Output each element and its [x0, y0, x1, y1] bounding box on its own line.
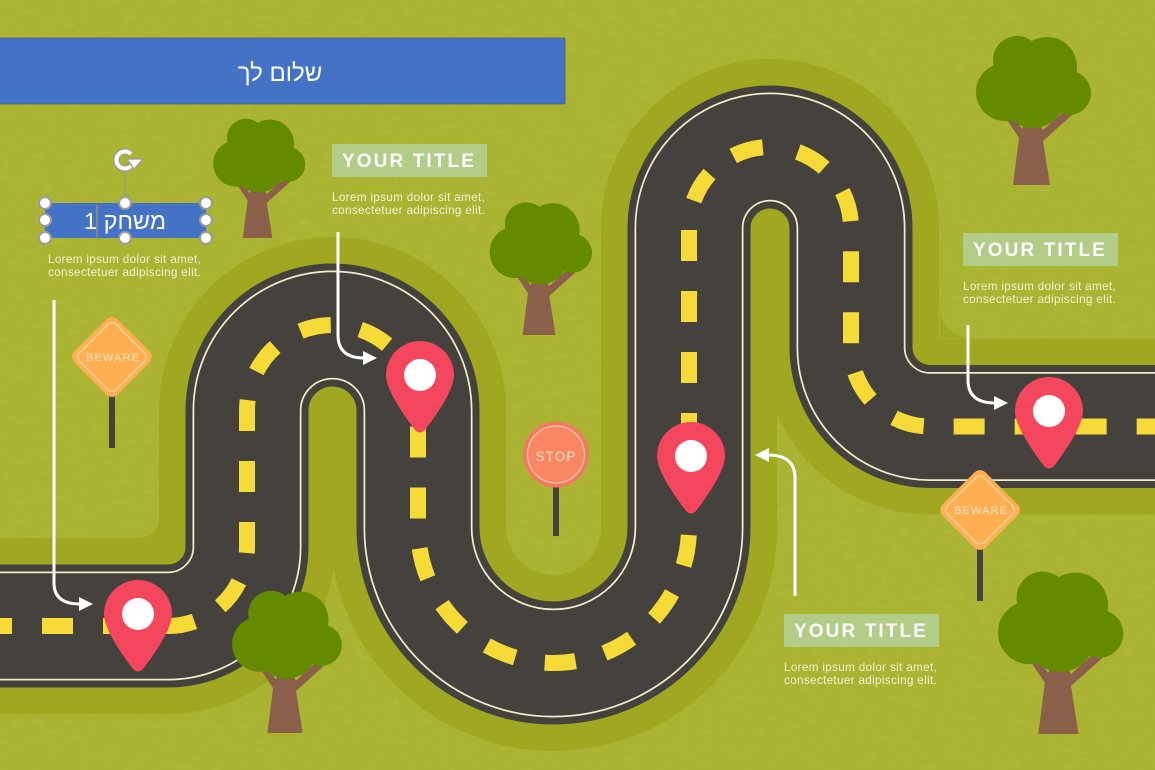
label: your title 3 [963, 233, 1118, 266]
sign: beware left [69, 314, 155, 448]
pin 3 [657, 422, 725, 514]
tree top right [976, 36, 1091, 185]
text block 3 [963, 280, 1116, 306]
text block 2: consectetuer adipiscing elit. [332, 204, 485, 217]
sign: beware right [937, 467, 1023, 601]
selected text box: game 1 [39, 151, 212, 244]
arrow 2 [338, 232, 377, 365]
sign: beware left: BEWARE [86, 352, 140, 364]
label: your title 4: YOUR TITLE [794, 621, 928, 642]
text block 2 [332, 191, 485, 217]
text block 3: Lorem ipsum dolor sit amet, [963, 280, 1116, 293]
label: your title 4 [784, 614, 939, 647]
arrow 3 [968, 325, 1008, 410]
text block 1 [48, 253, 201, 279]
sign: stop [523, 422, 589, 536]
text block 4: Lorem ipsum dolor sit amet, [784, 661, 937, 674]
tree top left [213, 119, 305, 238]
header banner [0, 38, 565, 104]
arrow 1 [54, 300, 93, 611]
text block 4 [784, 661, 937, 687]
text block 4: consectetuer adipiscing elit. [784, 674, 937, 687]
pin 4 [1015, 377, 1083, 468]
text block 2: Lorem ipsum dolor sit amet, [332, 191, 485, 204]
arrow 4 [755, 448, 795, 596]
text block 1: consectetuer adipiscing elit. [48, 266, 201, 279]
winding road [0, 147, 1155, 663]
label: your title 3: YOUR TITLE [973, 240, 1107, 261]
sign: beware right: BEWARE [954, 505, 1008, 517]
header banner: שלום לך [238, 60, 322, 87]
label: your title 2: YOUR TITLE [342, 151, 476, 172]
text block 1: Lorem ipsum dolor sit amet, [48, 253, 201, 266]
tree bottom left [232, 591, 342, 733]
selected text box: game 1: משחק 1 [84, 208, 166, 234]
tree centre [490, 202, 592, 335]
sign: stop: STOP [536, 449, 576, 464]
label: your title 2 [332, 144, 487, 177]
pin 2 [386, 341, 454, 432]
pin 1 [104, 580, 172, 672]
tree bottom right [998, 572, 1123, 734]
text block 3: consectetuer adipiscing elit. [963, 293, 1116, 306]
